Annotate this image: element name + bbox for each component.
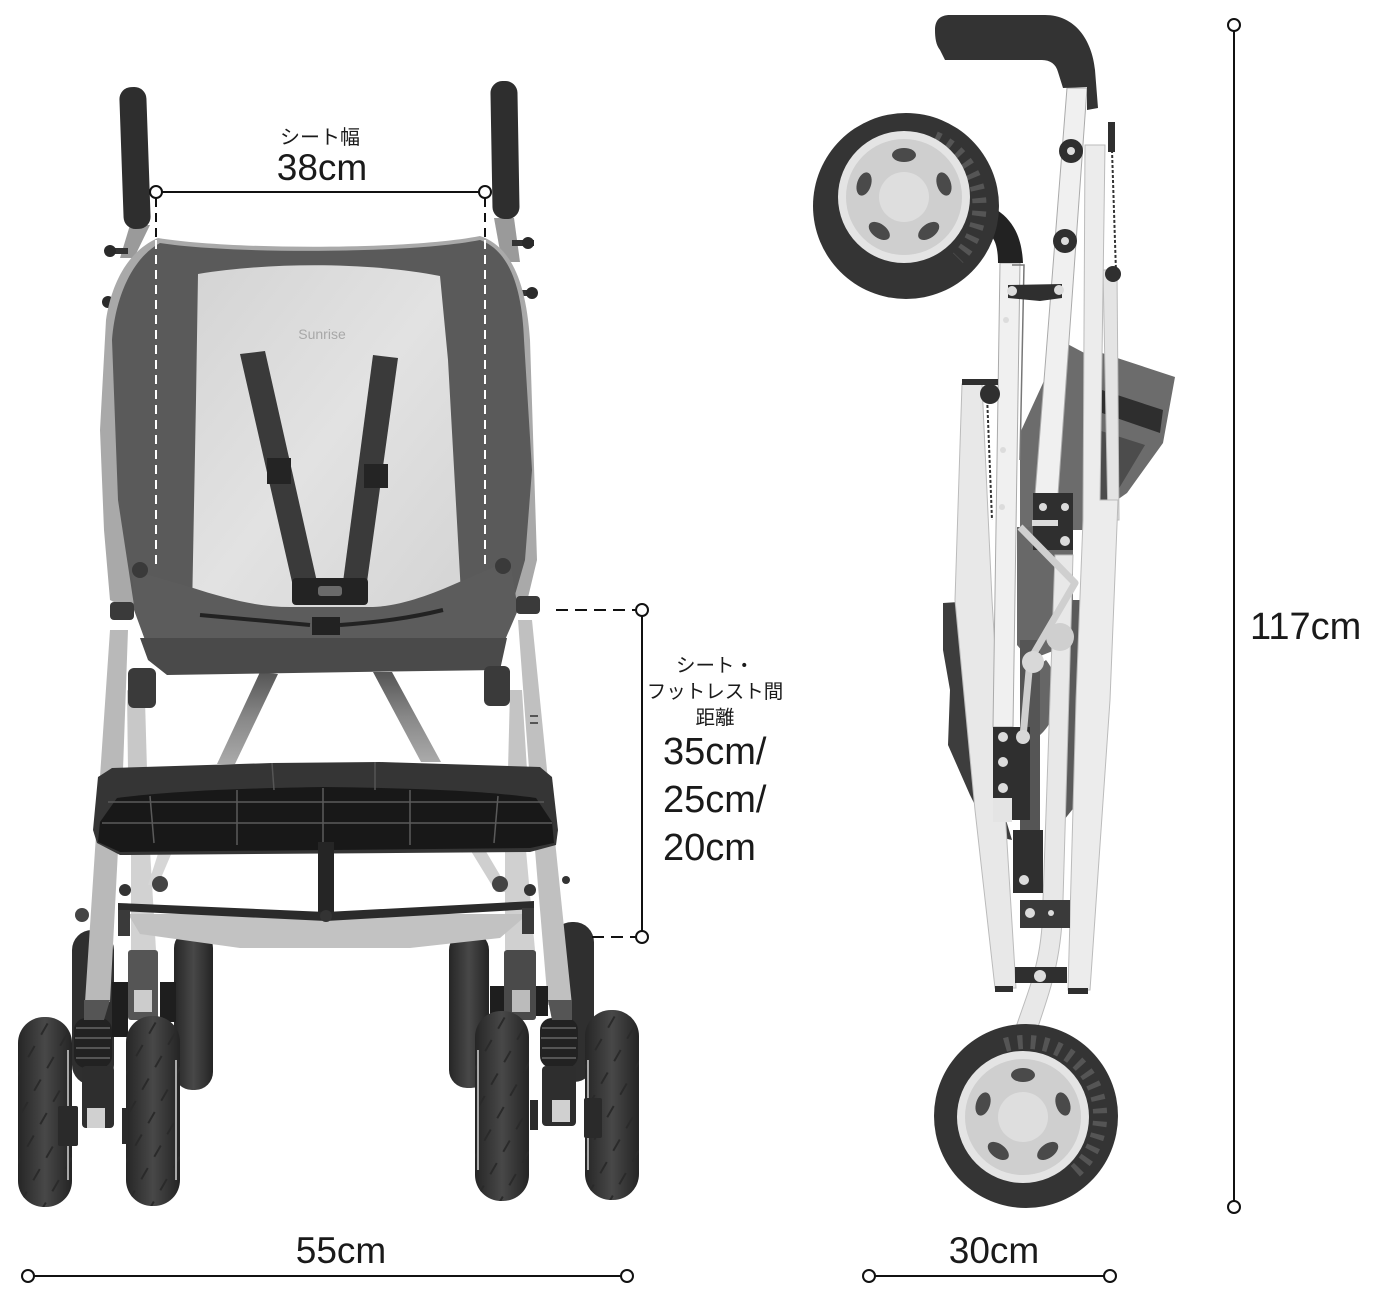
harness straps: [240, 351, 398, 582]
label: シート・フットレスト間距離: シート・: [676, 655, 754, 677]
label: シート・フットレスト間距離: 距離: [695, 707, 735, 729]
upper wheel: [813, 113, 1023, 299]
values: 35cm/ 25cm/ 20cm: 35cm/: [663, 731, 767, 773]
measure: folded height: [1228, 19, 1361, 1213]
measure: folded height: 117cm: [1250, 606, 1361, 648]
front wheels: [18, 1010, 639, 1207]
frame legs: [85, 620, 572, 1005]
measure: overall width: [22, 1230, 633, 1282]
frame tubes: [955, 88, 1119, 1030]
measure: overall width: 55cm: [296, 1230, 386, 1271]
stroller folded side view: [813, 15, 1175, 1208]
joints: [110, 558, 540, 708]
label: シート幅: シート幅: [280, 126, 360, 149]
measure: seat to footrest: [556, 604, 783, 943]
joints and plates: [962, 122, 1121, 994]
handle: [935, 15, 1098, 110]
seat pocket: [132, 560, 518, 640]
value: 38cm: 38cm: [277, 147, 367, 188]
buckle: [292, 578, 368, 605]
measure: folded width: [863, 1230, 1116, 1282]
seat lower band: [140, 638, 507, 675]
lower wheel: [934, 1024, 1118, 1208]
seat fabric: [100, 236, 537, 675]
folded fabric: [943, 340, 1175, 840]
stroller front view: [18, 81, 639, 1207]
values: 35cm/ 25cm/ 20cm: 20cm: [663, 827, 756, 869]
lower frame: [75, 876, 570, 1037]
handles: [102, 81, 538, 308]
label: シート・フットレスト間距離: フットレスト間: [647, 681, 783, 703]
logo: Sunrise: [298, 326, 346, 342]
footrest: [93, 716, 558, 914]
measure: seat width: [150, 126, 491, 565]
measure: folded width: 30cm: [949, 1230, 1039, 1271]
axle and suspension: [58, 1000, 602, 1146]
rear wheels: [72, 922, 594, 1090]
values: 35cm/ 25cm/ 20cm: 25cm/: [663, 779, 767, 821]
